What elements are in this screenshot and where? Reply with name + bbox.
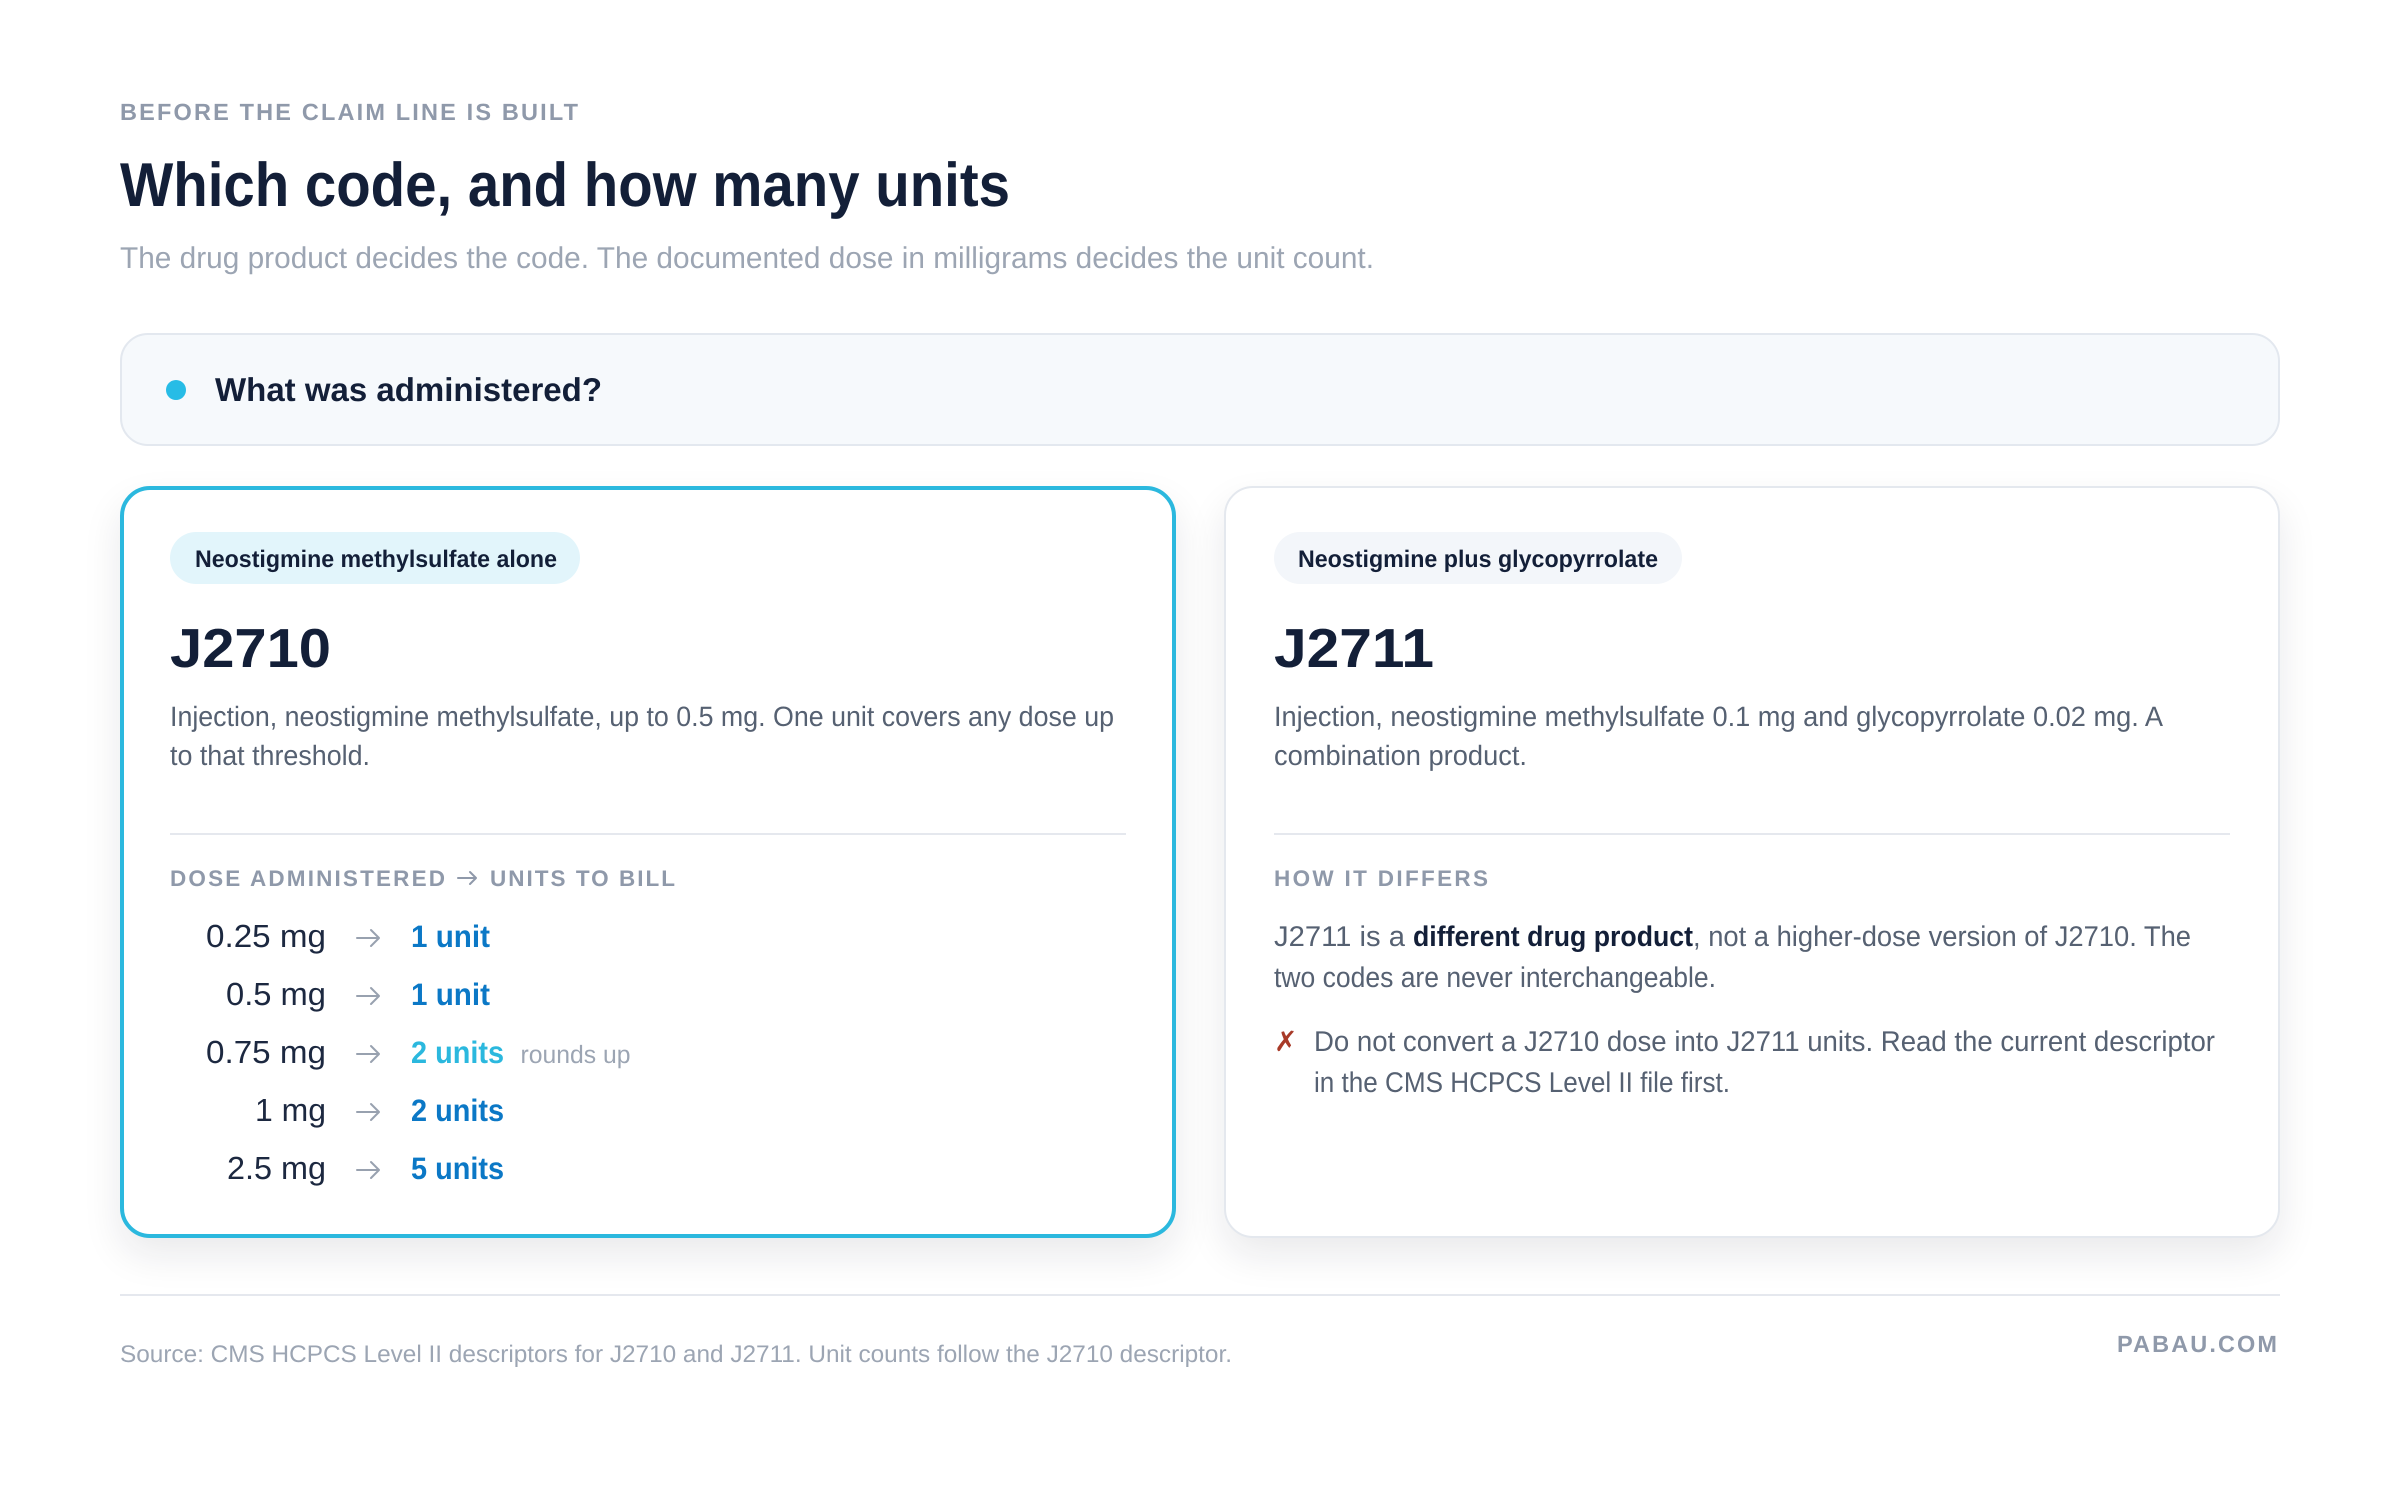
row 1 mg: 1 mg [255, 1092, 326, 1128]
dose table [206, 918, 630, 1186]
row 0.5 mg: 1 unit [411, 977, 490, 1012]
row 1 mg [255, 1092, 504, 1128]
pill: neostigmine plus glycopyrrolate [1274, 532, 1682, 584]
row 0.25 mg [206, 918, 490, 954]
row 2.5 mg: 5 units [411, 1151, 504, 1186]
pill: neostigmine plus glycopyrrolate: Neostigmine plus glycopyrrolate [1298, 546, 1658, 573]
card shadow [120, 504, 1176, 1255]
footer [120, 1294, 2280, 1368]
title: Which code, and how many units [120, 151, 1010, 220]
row 0.5 mg: 0.5 mg [226, 976, 326, 1012]
section label: dose to units: UNITS TO BILL [490, 866, 675, 891]
header [120, 99, 1374, 275]
warning note [1274, 1025, 2215, 1099]
J2711 description: combination product. [1274, 740, 1527, 771]
pill: neostigmine alone [170, 532, 580, 584]
code J2710: J2710 [170, 617, 331, 679]
prompt question: What was administered? [215, 371, 602, 408]
icon: red cross: ✗ [1274, 1025, 1297, 1058]
row 0.75 mg: 2 units [411, 1035, 504, 1070]
J2710 description [170, 701, 1114, 771]
warning note: in the CMS HCPCS Level II file first. [1314, 1067, 1730, 1099]
row 0.5 mg [226, 976, 490, 1012]
card outline [1225, 487, 2279, 1237]
how it differs paragraph [1274, 921, 2191, 994]
section label: how it differs: HOW IT DIFFERS [1274, 866, 1488, 891]
row 2.5 mg [227, 1150, 504, 1186]
J2711 description: Injection, neostigmine methylsulfate 0.1 mg and glycopyrrolate 0.02 mg. A [1274, 701, 2163, 732]
how it differs paragraph: , not a higher-dose version of J2710. The [1693, 921, 2191, 953]
how it differs paragraph: J2711 is a [1274, 921, 1405, 953]
J2710 description: to that threshold. [170, 740, 370, 771]
prompt bar: what was administered [121, 334, 2279, 445]
code J2711: J2711 [1274, 617, 1434, 679]
how it differs paragraph: two codes are never interchangeable. [1274, 962, 1716, 994]
eyebrow: BEFORE THE CLAIM LINE IS BUILT [120, 99, 579, 125]
card shadow [1224, 504, 2280, 1255]
row 0.75 mg: 0.75 mg [206, 1034, 326, 1070]
card outline [122, 488, 1174, 1236]
warning note: Do not convert a J2710 dose into J2711 units. Read the current descriptor [1314, 1026, 2215, 1058]
panel: J2711 [1224, 487, 2280, 1255]
J2710 description: Injection, neostigmine methylsulfate, up to 0.5 mg. One unit covers any dose up [170, 701, 1114, 732]
section label: dose to units: DOSE ADMINISTERED [170, 866, 445, 891]
row 0.25 mg: 1 unit [411, 919, 490, 954]
row 0.25 mg: 0.25 mg [206, 918, 326, 954]
row 1 mg: 2 units [411, 1093, 504, 1128]
row 0.75 mg: rounds up [520, 1041, 630, 1069]
pill: neostigmine alone: Neostigmine methylsulfate alone [195, 546, 557, 573]
row 2.5 mg: 2.5 mg [227, 1150, 326, 1186]
panel: J2710 [120, 488, 1176, 1255]
J2711 description [1274, 701, 2163, 771]
source note: Source: CMS HCPCS Level II descriptors for J2710 and J2711. Unit counts follow the J2710 descriptor. [120, 1341, 1232, 1368]
icon: cyan dot [166, 380, 186, 400]
how it differs paragraph: different drug product [1413, 921, 1693, 953]
subtitle: The drug product decides the code. The documented dose in milligrams decides the unit count. [120, 242, 1374, 275]
section label: dose to units [170, 866, 675, 891]
row 0.75 mg [206, 1034, 630, 1070]
brand: PABAU.COM [2117, 1331, 2277, 1357]
